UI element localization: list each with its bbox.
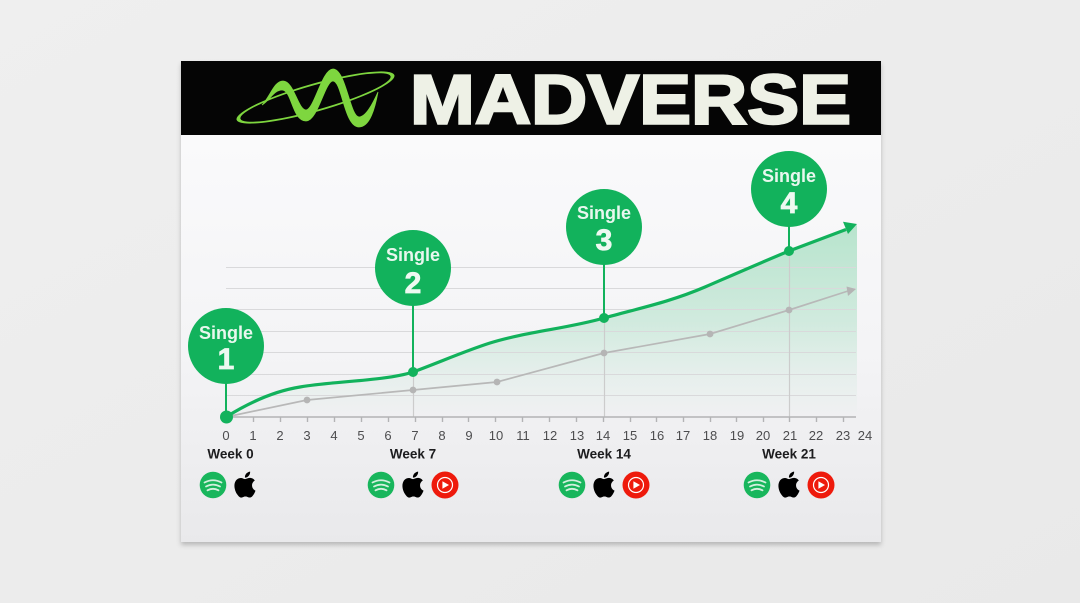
icon: Madverse logo bbox=[233, 62, 398, 133]
x axis bbox=[222, 417, 872, 443]
label: Week 7: Week 7 bbox=[390, 446, 436, 462]
x axis: 7 bbox=[411, 428, 419, 443]
green growth line bbox=[226, 222, 857, 417]
marker: Single 4: 4 bbox=[781, 187, 798, 220]
marker: Single 2: Single bbox=[386, 245, 440, 265]
x axis: 1 bbox=[249, 428, 257, 443]
title: MADVERSE bbox=[410, 60, 851, 138]
x axis: 0 bbox=[222, 428, 230, 443]
marker: Single 1: 1 bbox=[218, 343, 234, 376]
label: Week 14: Week 14 bbox=[577, 446, 631, 462]
x axis: 2 bbox=[276, 428, 284, 443]
marker: Single 3: 3 bbox=[596, 224, 612, 257]
x axis: 6 bbox=[384, 428, 392, 443]
icon: Apple bbox=[234, 472, 256, 498]
week 21 group bbox=[744, 446, 834, 498]
marker: Single 4 bbox=[751, 151, 827, 256]
icon: Apple bbox=[778, 472, 800, 498]
grid lines bbox=[226, 268, 856, 396]
icon: Apple bbox=[402, 472, 424, 498]
x axis: 4 bbox=[330, 428, 338, 443]
marker: Single 2: 2 bbox=[405, 267, 421, 300]
x axis: 21 bbox=[783, 428, 797, 443]
marker: Single 1: Single bbox=[199, 323, 253, 343]
x axis: 5 bbox=[357, 428, 365, 443]
x axis: 16 bbox=[650, 428, 664, 443]
marker: Single 1 bbox=[188, 308, 264, 424]
x axis: 10 bbox=[489, 428, 503, 443]
x axis: 20 bbox=[756, 428, 770, 443]
header band bbox=[181, 60, 881, 138]
x axis: 23 bbox=[836, 428, 850, 443]
x axis: 18 bbox=[703, 428, 717, 443]
x axis: 8 bbox=[438, 428, 446, 443]
label: Week 0: Week 0 bbox=[207, 446, 254, 462]
grey comparison line bbox=[226, 286, 856, 417]
x axis: 17 bbox=[676, 428, 690, 443]
x axis: 24 bbox=[858, 428, 872, 443]
chart bbox=[222, 222, 872, 443]
marker: Single 3: Single bbox=[577, 203, 631, 223]
icon: YouTube Music bbox=[622, 472, 650, 498]
icon: Apple bbox=[593, 472, 615, 498]
icon: Spotify bbox=[744, 472, 770, 498]
x axis: 19 bbox=[730, 428, 744, 443]
icon: Spotify bbox=[200, 472, 226, 498]
icon: YouTube Music bbox=[808, 472, 834, 498]
x axis: 11 bbox=[516, 428, 530, 443]
icon: YouTube Music bbox=[432, 472, 458, 498]
poster panel bbox=[181, 61, 881, 542]
week 7 group bbox=[368, 446, 458, 498]
week guide lines bbox=[414, 251, 790, 417]
week 14 group bbox=[559, 446, 650, 498]
week 0 group bbox=[200, 446, 256, 498]
icon: Spotify bbox=[559, 472, 585, 498]
icon: Spotify bbox=[368, 472, 394, 498]
area under green line bbox=[226, 225, 857, 417]
x axis: 12 bbox=[543, 428, 557, 443]
x axis: 13 bbox=[570, 428, 584, 443]
x axis: 14 bbox=[596, 428, 610, 443]
x axis: 3 bbox=[303, 428, 311, 443]
marker: Single 3 bbox=[566, 189, 642, 323]
x axis: 15 bbox=[623, 428, 637, 443]
label: Week 21: Week 21 bbox=[762, 446, 816, 462]
x axis: 9 bbox=[465, 428, 473, 443]
marker: Single 2 bbox=[375, 230, 451, 377]
x axis: 22 bbox=[809, 428, 823, 443]
marker: Single 4: Single bbox=[762, 166, 816, 186]
